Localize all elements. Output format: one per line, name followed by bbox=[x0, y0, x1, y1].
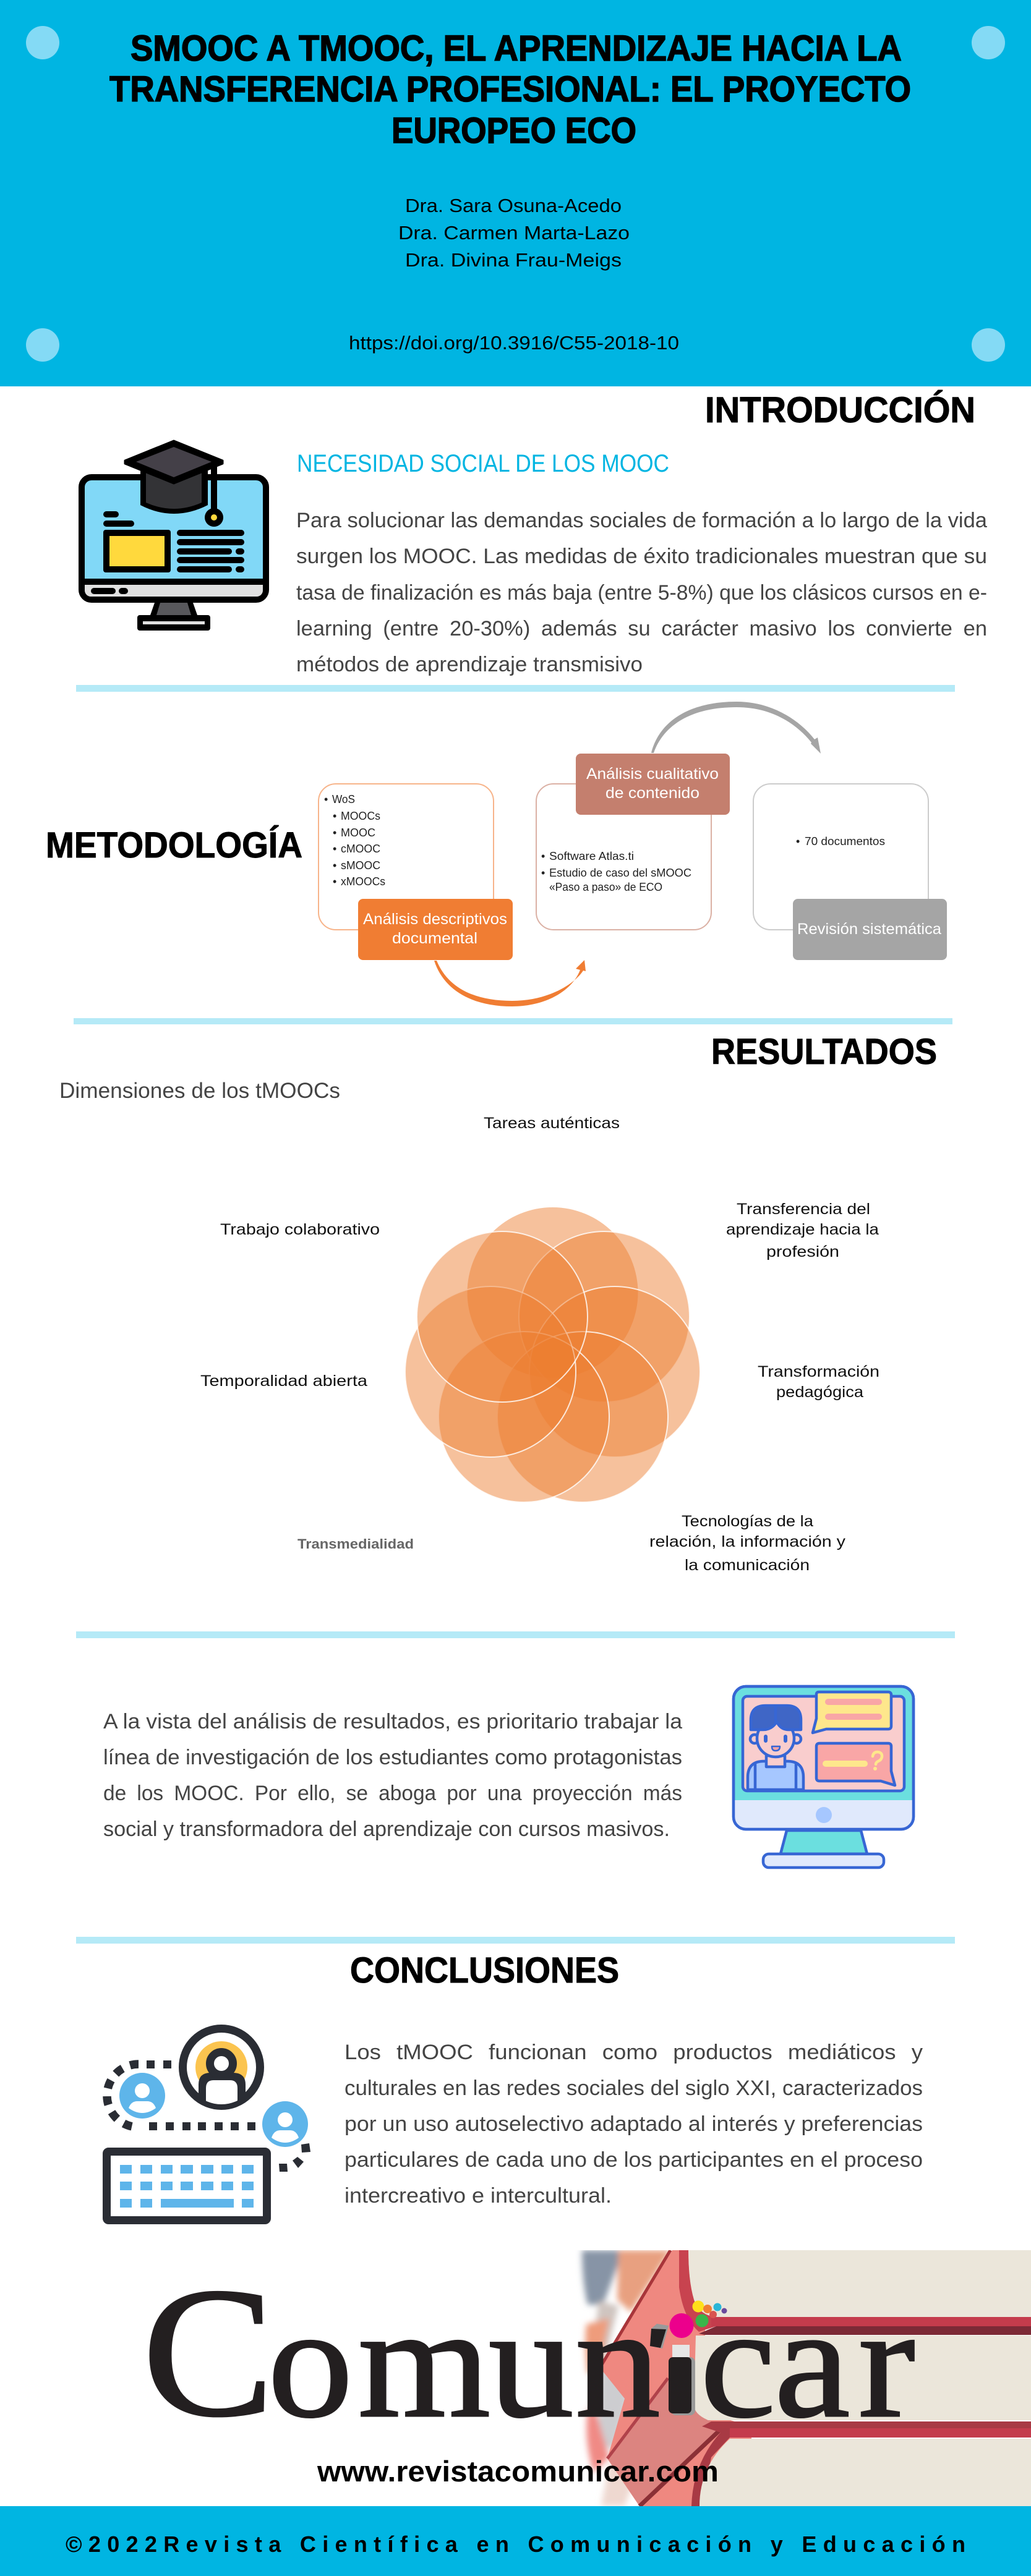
header banner bbox=[0, 0, 1031, 386]
box: step 3 bbox=[753, 784, 947, 960]
step 1 list: • bbox=[333, 875, 336, 888]
icon: connected users and keyboard bbox=[106, 2029, 310, 2221]
intro text: learning (entre 20-30%) además su carácter masivo los convierte en bbox=[296, 617, 987, 640]
decorative dots bbox=[26, 26, 1005, 362]
venn labels: aprendizaje hacia la bbox=[726, 1221, 879, 1238]
step 3 list: • bbox=[796, 835, 800, 848]
intro text bbox=[296, 509, 987, 676]
step 3 list: 70 documentos bbox=[805, 835, 885, 848]
subheading: NECESIDAD SOCIAL DE LOS MOOC bbox=[297, 450, 669, 477]
section: resultados bbox=[59, 1032, 937, 1574]
step 3 label: Revisión sistemática bbox=[797, 920, 941, 938]
step 2 list: Estudio de caso del sMOOC bbox=[549, 867, 691, 879]
step 1 list: MOOC bbox=[341, 827, 375, 839]
section: introducción bbox=[79, 390, 987, 676]
step 2 list: • bbox=[541, 867, 545, 879]
section: discussion bbox=[103, 1686, 913, 1868]
step 2 list: Software Atlas.ti bbox=[549, 850, 634, 862]
logo: Comunicar bbox=[142, 2250, 915, 2455]
conclusions text: intercreativo e intercultural. bbox=[344, 2184, 612, 2208]
section: conclusiones bbox=[106, 1950, 923, 2221]
title bbox=[109, 28, 911, 151]
logo wordmark: u bbox=[489, 2274, 574, 2451]
intro text: tasa de finalización es más baja (entre 5-8%) que los clásicos cursos en e- bbox=[296, 581, 987, 605]
step 1 list: cMOOC bbox=[341, 843, 380, 855]
step 1 list: MOOCs bbox=[341, 810, 380, 822]
arrow: orange curved bbox=[434, 960, 586, 1006]
step 1 list: • bbox=[333, 859, 336, 872]
website url: www.revistacomunicar.com bbox=[317, 2455, 719, 2488]
venn diagram bbox=[405, 1207, 700, 1502]
intro text: surgen los MOOC. Las medidas de éxito tradicionales muestran que su bbox=[296, 545, 987, 568]
step 1 list: • bbox=[333, 827, 336, 839]
footer banner bbox=[0, 2506, 1031, 2576]
venn labels: pedagógica bbox=[776, 1384, 863, 1401]
conclusions text: particulares de cada uno de los participantes en el proceso bbox=[344, 2148, 923, 2172]
heading: introducción: INTRODUCCIÓN bbox=[705, 390, 975, 430]
title: TRANSFERENCIA PROFESIONAL: EL PROYECTO bbox=[109, 69, 911, 109]
authors bbox=[398, 195, 630, 271]
step 1 list: WoS bbox=[332, 793, 355, 806]
conclusions text: Los tMOOC funcionan como productos mediáticos y bbox=[344, 2041, 923, 2064]
venn labels: relación, la información y bbox=[649, 1533, 846, 1550]
authors: Dra. Sara Osuna-Acedo bbox=[405, 195, 622, 216]
step 1 label bbox=[358, 899, 513, 960]
photo: stack of books bbox=[582, 2250, 1031, 2506]
heading: metodología: METODOLOGÍA bbox=[46, 825, 302, 865]
authors: Dra. Carmen Marta-Lazo bbox=[398, 222, 630, 244]
logo wordmark: c bbox=[700, 2274, 776, 2451]
venn labels: Tareas auténticas bbox=[484, 1115, 620, 1132]
logo wordmark: m bbox=[358, 2274, 490, 2451]
step 1 list: • bbox=[333, 843, 336, 855]
box: step 2 bbox=[536, 754, 730, 930]
venn labels: Transmedialidad bbox=[297, 1536, 414, 1552]
logo wordmark: a bbox=[774, 2274, 850, 2451]
icon: monitor with student and chat bubbles bbox=[734, 1686, 913, 1868]
discussion text: social y transformadora del aprendizaje con cursos masivos. bbox=[103, 1817, 670, 1841]
step 1 list: • bbox=[333, 810, 336, 822]
arrow: grey curved bbox=[651, 702, 821, 754]
section: metodología bbox=[46, 702, 947, 1006]
venn labels: Tecnologías de la bbox=[682, 1513, 813, 1530]
step 2 label: de contenido bbox=[605, 784, 699, 802]
venn labels: Transferencia del bbox=[737, 1201, 870, 1218]
logo wordmark: r bbox=[858, 2274, 915, 2451]
step 2 list: «Paso a paso» de ECO bbox=[549, 881, 662, 893]
logo wordmark: n bbox=[575, 2274, 661, 2451]
step 3 label bbox=[793, 899, 947, 960]
step 1 list bbox=[324, 793, 385, 888]
step 1 list: • bbox=[324, 793, 328, 806]
step 1 list: xMOOCs bbox=[341, 875, 385, 888]
discussion text: A la vista del análisis de resultados, es prioritario trabajar la bbox=[103, 1710, 682, 1733]
heading: resultados: RESULTADOS bbox=[711, 1032, 937, 1072]
step 1 label: documental bbox=[392, 930, 477, 947]
discussion text: de los MOOC. Por ello, se aboga por una proyección más bbox=[103, 1782, 682, 1805]
conclusions text bbox=[344, 2041, 923, 2208]
logo wordmark: o bbox=[268, 2274, 353, 2451]
doi: https://doi.org/10.3916/C55-2018-10 bbox=[349, 332, 679, 354]
title: EUROPEO ECO bbox=[391, 111, 636, 151]
venn labels bbox=[200, 1115, 879, 1574]
step 1 label: Análisis descriptivos bbox=[363, 911, 507, 928]
venn labels: Temporalidad abierta bbox=[200, 1372, 367, 1390]
top pages bbox=[688, 2250, 1031, 2317]
discussion text: línea de investigación de los estudiantes como protagonistas bbox=[103, 1746, 682, 1769]
step 2 label bbox=[576, 754, 730, 815]
logo: USB stick i bbox=[650, 2324, 695, 2415]
venn labels: profesión bbox=[766, 1243, 839, 1260]
venn labels: Trabajo colaborativo bbox=[220, 1221, 380, 1238]
box: step 1 bbox=[319, 784, 513, 960]
step 2 list: • bbox=[541, 850, 545, 862]
step 2 label: Análisis cualitativo bbox=[586, 765, 719, 783]
chart heading: Dimensiones de los tMOOCs bbox=[59, 1079, 340, 1103]
discussion text bbox=[103, 1710, 682, 1841]
intro text: métodos de aprendizaje transmisivo bbox=[296, 653, 643, 676]
step 2 list bbox=[541, 850, 691, 893]
step 1 list: sMOOC bbox=[341, 859, 380, 872]
logo: coloured dots bbox=[669, 2301, 727, 2338]
footer text: ©2022Revista Científica en Comunicación y Educación bbox=[66, 2531, 965, 2557]
heading: conclusiones: CONCLUSIONES bbox=[350, 1950, 619, 1991]
base of covers bbox=[600, 2250, 751, 2506]
venn labels: Transformación bbox=[758, 1363, 879, 1380]
icon: monitor with graduation cap bbox=[79, 441, 269, 631]
conclusions text: por un uso autoselectivo adaptado al interés y preferencias bbox=[344, 2112, 923, 2136]
authors: Dra. Divina Frau-Meigs bbox=[405, 249, 622, 271]
title: SMOOC A TMOOC, EL APRENDIZAJE HACIA LA bbox=[130, 28, 902, 69]
conclusions text: culturales en las redes sociales del siglo XXI, caracterizados bbox=[344, 2077, 923, 2100]
logo wordmark: C bbox=[142, 2250, 275, 2455]
venn labels: la comunicación bbox=[685, 1557, 810, 1574]
intro text: Para solucionar las demandas sociales de formación a lo largo de la vida bbox=[296, 509, 987, 532]
